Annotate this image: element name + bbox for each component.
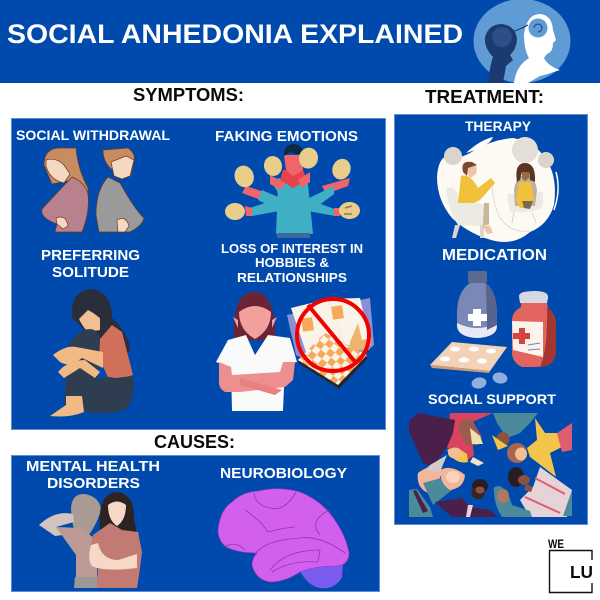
label: faking emotions: FAKING EMOTIONS bbox=[215, 129, 358, 145]
illustration: woman and her shadow self bbox=[39, 492, 142, 588]
label: social withdrawal: SOCIAL WITHDRAWAL bbox=[16, 127, 170, 143]
logo: We Lu bbox=[548, 539, 593, 592]
panel: symptoms: SOLITUDE bbox=[52, 264, 129, 281]
panel: causes bbox=[12, 456, 380, 592]
heading: causes: CAUSES: bbox=[154, 431, 235, 452]
illustration: man with masks bbox=[225, 144, 360, 238]
illustration: pill bottles and tablets bbox=[430, 271, 556, 390]
label: medication: MEDICATION bbox=[442, 247, 547, 264]
illustration: group of people in a circle bbox=[409, 413, 572, 517]
panel: causes: DISORDERS bbox=[47, 475, 140, 492]
panel: symptoms: RELATIONSHIPS bbox=[237, 270, 347, 285]
illustration: annoyed woman and crossed out hobbies bbox=[216, 292, 374, 411]
label: loss of interest: LOSS OF INTEREST IN bbox=[221, 241, 363, 256]
illustration: purple brain bbox=[218, 489, 349, 588]
label: preferring solitude: PREFERRING bbox=[41, 247, 140, 264]
panel: treatment bbox=[394, 114, 588, 524]
title: SOCIAL ANHEDONIA EXPLAINED bbox=[7, 19, 463, 49]
illustration: two people back to back bbox=[42, 148, 144, 232]
illustration: sad woman hugging knees bbox=[50, 289, 134, 416]
panel: symptoms: HOBBIES & bbox=[255, 255, 329, 270]
label: therapy: THERAPY bbox=[465, 118, 532, 134]
heading: symptoms: SYMPTOMS: bbox=[133, 84, 244, 105]
illustration: therapy session bbox=[437, 137, 558, 242]
panel: symptoms bbox=[12, 118, 386, 430]
header banner bbox=[0, 0, 600, 83]
heading: treatment: TREATMENT: bbox=[425, 86, 544, 107]
label: mental health disorders: MENTAL HEALTH bbox=[26, 458, 160, 475]
logo: We Lu: WE bbox=[548, 539, 564, 551]
label: social support: SOCIAL SUPPORT bbox=[428, 391, 556, 407]
icon: two heads with brains bbox=[474, 0, 570, 83]
label: neurobiology: NEUROBIOLOGY bbox=[220, 465, 347, 482]
logo: We Lu: LU bbox=[570, 562, 593, 582]
